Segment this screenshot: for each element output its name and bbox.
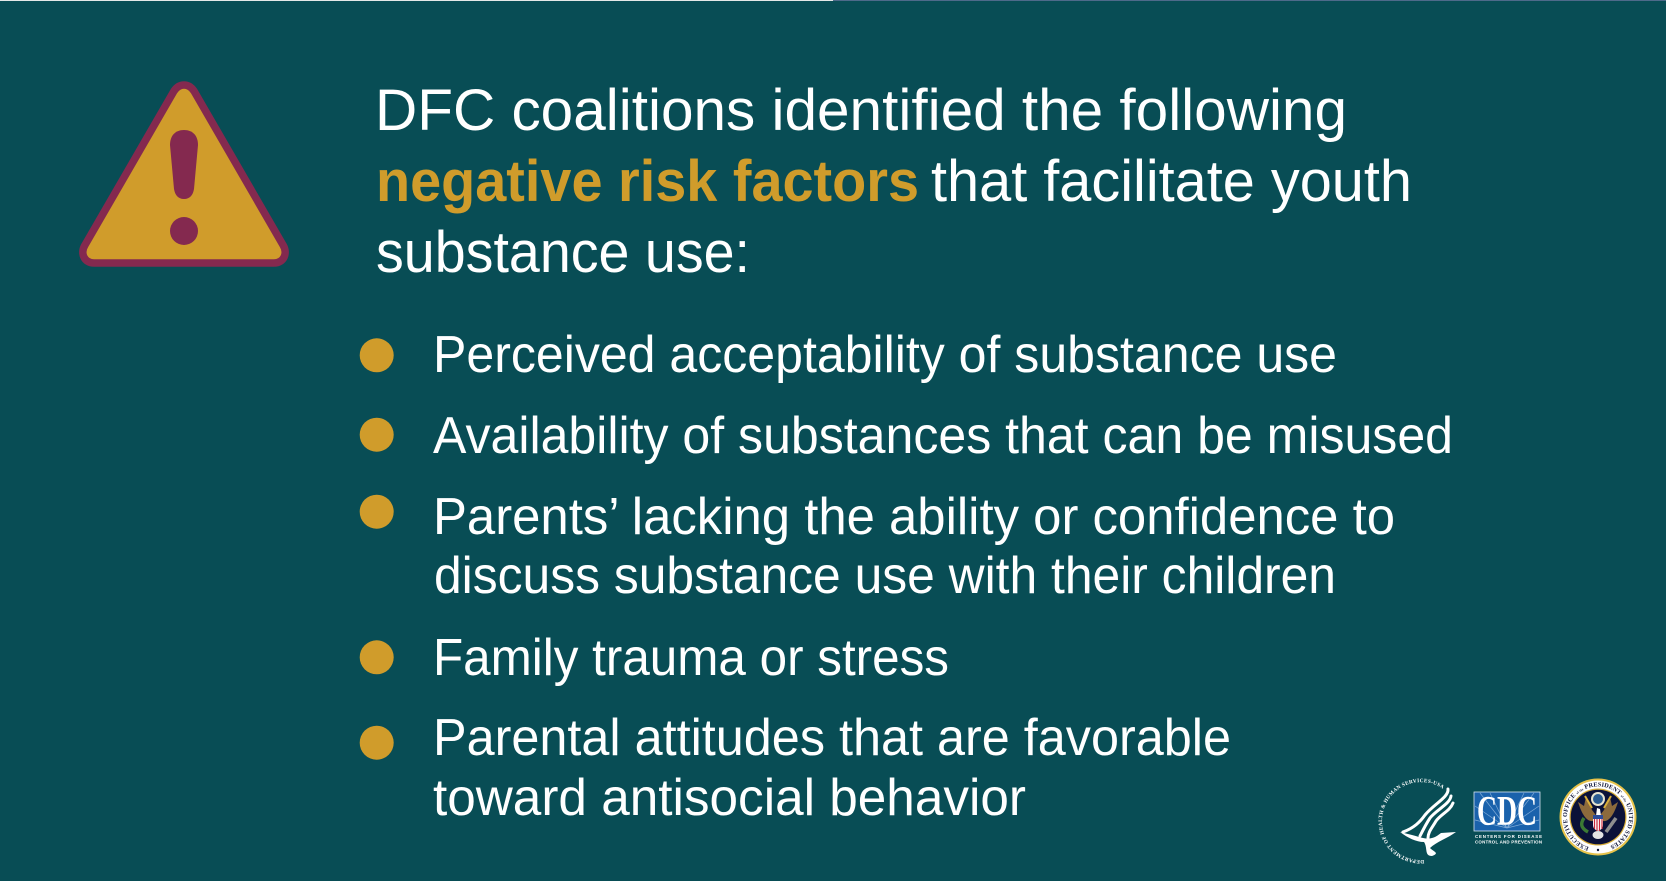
heading: that facilitate youth [931, 149, 1412, 214]
heading [375, 78, 1412, 285]
list item: parents lacking ability: Parents’ lacking the ability or confidence to [433, 488, 1395, 546]
list item: family trauma: Family trauma or stress [433, 629, 949, 687]
heading: DFC coalitions identified the following [375, 78, 1347, 143]
logo: CDC [1474, 789, 1542, 844]
list item: parents lacking ability: discuss substance use with their children [434, 547, 1336, 605]
list item: parental attitudes: toward antisocial behavior [433, 769, 1026, 827]
heading: substance use: [376, 220, 750, 285]
logo: HHS: DEPARTMENT OF HEALTH & HUMAN SERVICES-USA [1378, 778, 1444, 864]
logo: Executive Office of the President seal: EXECUTIVE OFFICE of the PRESIDENT of the UNITED STATES [1563, 782, 1634, 851]
icon: warning triangle [83, 85, 285, 263]
list item: parental attitudes: Parental attitudes that are favorable [433, 709, 1231, 767]
list item: perceived acceptability: Perceived acceptability of substance use [433, 326, 1337, 384]
heading: negative risk factors [376, 149, 919, 214]
list item: parents lacking ability [360, 488, 1395, 605]
list item: availability: Availability of substances that can be misused [433, 407, 1453, 465]
logo: CDC: CDC [1477, 789, 1537, 835]
logo: CDC: CONTROL AND PREVENTION [1475, 840, 1542, 844]
logo: CDC: CENTERS FOR DISEASE [1475, 834, 1542, 839]
list item: parental attitudes [360, 709, 1231, 827]
